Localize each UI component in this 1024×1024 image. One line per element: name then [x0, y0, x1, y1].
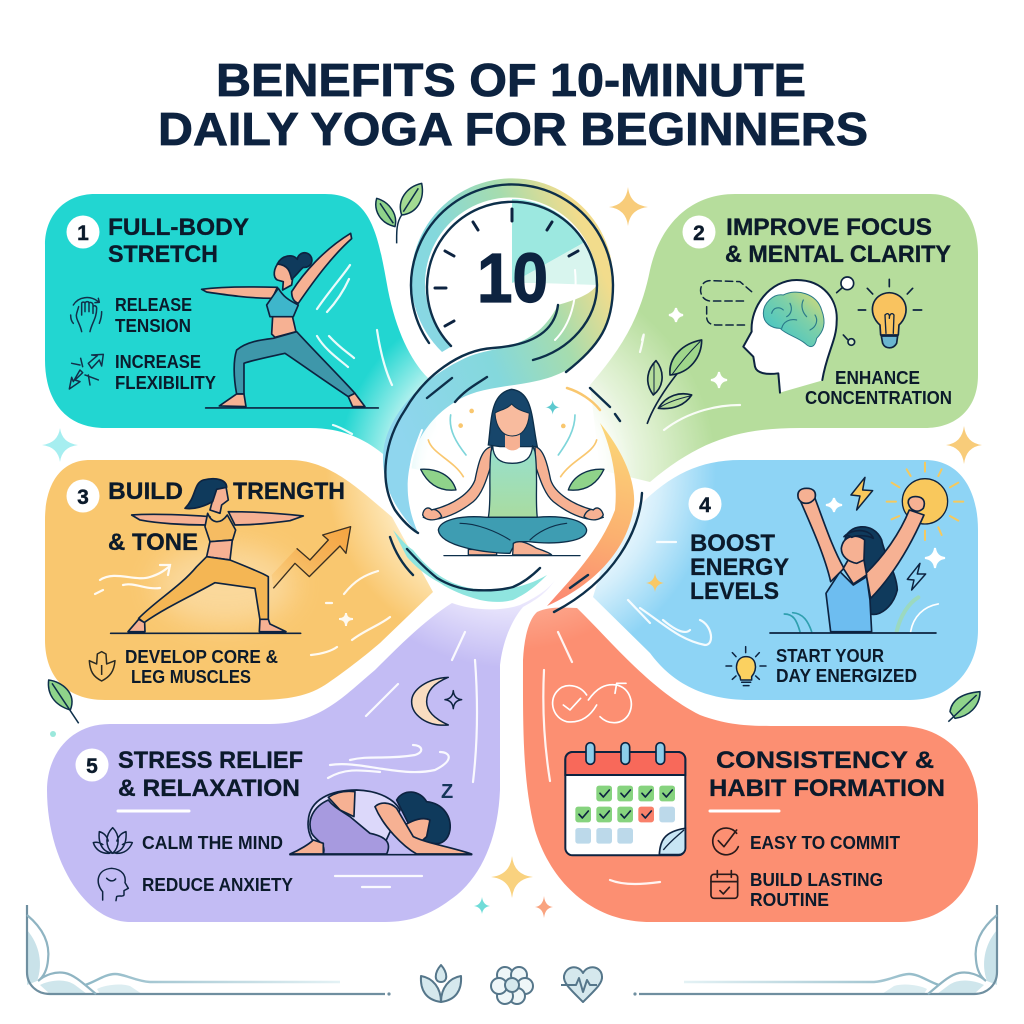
icon: leaves top: [376, 183, 422, 243]
heading: stress relief and relaxation: & RELAXATION: [118, 775, 300, 802]
panel 1: full-body stretch: [45, 194, 445, 475]
icon: heart with pulse: [561, 967, 602, 1002]
item: release tension: [115, 294, 192, 336]
panel 5: stress relief: [47, 580, 555, 922]
heading: full-body stretch: STRETCH: [108, 241, 218, 268]
item: start your day energized: DAY ENERGIZED: [776, 665, 917, 686]
infinity swirl band: [383, 178, 613, 533]
icon: expand arrows: [69, 354, 103, 389]
number badge 3: 3: [77, 486, 89, 509]
item: enhance concentration: CONCENTRATION: [805, 387, 952, 408]
item: start your day energized: START YOUR: [776, 645, 884, 666]
item: develop core and leg muscles: [125, 646, 278, 687]
lower swirl outlines: [390, 537, 540, 590]
item: calm the mind: CALM THE MIND: [142, 832, 283, 853]
white wind lines 5: [328, 632, 477, 887]
item: build lasting routine: ROUTINE: [750, 889, 829, 910]
heading: improve focus and mental clarity: IMPROVE FOCUS: [726, 214, 932, 241]
heading: build strength and tone: TRENGTH: [233, 478, 345, 505]
central swirl and clock: [383, 178, 642, 612]
heading: consistency and habit formation: HABIT FORMATION: [709, 775, 945, 802]
heading: boost energy levels: BOOST: [690, 530, 775, 557]
sparkles: [42, 187, 982, 918]
soft glow behind figure: [155, 545, 295, 625]
icon: hand: [71, 298, 102, 332]
number badge 1: [66, 216, 100, 248]
icon: small light bulb: [726, 647, 766, 686]
icon: core leaf: [89, 652, 115, 681]
item: easy to commit: EASY TO COMMIT: [750, 832, 901, 853]
item: enhance concentration: ENHANCE: [835, 367, 920, 388]
item: release tension: TENSION: [115, 315, 191, 336]
number badge 5: 5: [86, 755, 98, 778]
clock ticks: [435, 209, 578, 326]
white accents 4: [628, 498, 945, 645]
title: [158, 54, 868, 155]
bottom frame left: [27, 905, 391, 996]
item: start your day energized: [776, 645, 917, 686]
icon: light bulb with nodes: [837, 277, 922, 348]
orange lower arc: [547, 423, 634, 606]
white accents 2: [640, 308, 740, 430]
number badge 3: [66, 480, 100, 512]
heading: build strength and tone: [108, 478, 345, 556]
swirl outlines: [385, 184, 620, 533]
number badge 5: [76, 748, 108, 782]
title: DAILY YOGA FOR BEGINNERS: [158, 103, 868, 155]
clock number 10: 10: [477, 239, 548, 317]
figure: meditating woman: [421, 389, 604, 556]
heading: consistency and habit formation: [709, 747, 945, 802]
item: reduce anxiety: REDUCE ANXIETY: [142, 874, 294, 895]
icon: rising arrow: [272, 527, 351, 588]
heading: full-body stretch: [108, 214, 249, 268]
item: develop core and leg muscles: LEG MUSCLES: [131, 666, 251, 687]
heading: full-body stretch: FULL-BODY: [108, 214, 249, 241]
number badge 4: [688, 488, 722, 520]
teal lower swirl: [393, 530, 547, 602]
figure: warrior pose strength: [111, 479, 303, 633]
number badge 1: 1: [77, 222, 89, 245]
item: enhance concentration: [805, 367, 952, 408]
heading: improve focus and mental clarity: [725, 214, 951, 268]
figure: warrior pose stretch: [202, 233, 378, 408]
icons: lightning bolts: [851, 477, 926, 590]
heading: build strength and tone: BUILD: [108, 478, 183, 505]
icon: leaf left: [48, 680, 79, 723]
panel 6: consistency and habit formation: [523, 608, 978, 922]
divider 5: [118, 810, 189, 812]
white motion lines 1: [317, 265, 392, 434]
white accents 3: [95, 565, 390, 655]
number badge 2: [682, 216, 716, 248]
panel 3: build strength and tone: [45, 460, 433, 700]
icon: sun: [887, 463, 963, 540]
icon: check circle: [713, 828, 738, 855]
heading: stress relief and relaxation: [118, 747, 303, 802]
orange accent: [567, 388, 600, 410]
divider 6: [710, 810, 779, 812]
clock face: [425, 199, 597, 371]
item: increase flexibility: FLEXIBILITY: [115, 372, 217, 393]
letter Z: Z: [441, 781, 453, 803]
centre white glow: [412, 370, 608, 566]
figure: child's pose: [290, 790, 472, 855]
item: build lasting routine: [750, 869, 883, 910]
item: develop core and leg muscles: DEVELOP CORE &: [125, 646, 278, 667]
bottom frame right: [633, 905, 997, 996]
item: build lasting routine: BUILD LASTING: [750, 869, 883, 890]
heading: stress relief and relaxation: STRESS RELIEF: [118, 747, 303, 774]
icon: sprout with drop: [421, 965, 461, 1002]
item: increase flexibility: [115, 351, 217, 393]
icon: lotus: [93, 828, 132, 853]
icon: head and brain: [701, 280, 837, 393]
item: increase flexibility: INCREASE: [115, 351, 201, 372]
icon: moon and star: [412, 677, 462, 725]
heading: consistency and habit formation: CONSISTENCY &: [716, 747, 934, 774]
white accents 6: [543, 632, 660, 884]
heading: boost energy levels: LEVELS: [690, 578, 779, 605]
figure: energized woman: [770, 488, 938, 633]
icon: calm head: [98, 868, 128, 901]
panel 4: boost energy levels: [593, 460, 978, 700]
title: BENEFITS OF 10-MINUTE: [216, 54, 806, 106]
heading: boost energy levels: ENERGY: [690, 554, 789, 581]
orange arc outline: [554, 493, 642, 612]
icon: infinity habit loop: [553, 683, 631, 723]
icon: leaf right: [948, 692, 980, 722]
icon: calendar with checks: [565, 743, 685, 855]
number badge 2: 2: [693, 222, 705, 245]
number badge 4: 4: [699, 494, 711, 517]
icon: small calendar: [711, 871, 738, 898]
item: release tension: RELEASE: [115, 294, 192, 315]
icon: flower: [491, 967, 533, 1004]
icon: plant sprig: [647, 340, 702, 423]
heading: boost energy levels: [690, 530, 789, 605]
panel 2: improve focus: [590, 194, 978, 482]
heading: build strength and tone: & TONE: [108, 529, 198, 556]
swirl highlights: [410, 270, 576, 480]
heading: improve focus and mental clarity: & MENTAL CLARITY: [725, 241, 951, 268]
